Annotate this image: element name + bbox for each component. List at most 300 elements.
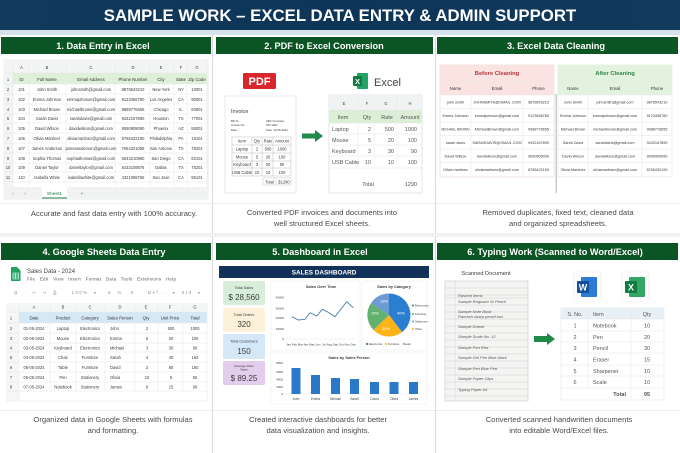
- table: typed items: 95: [644, 392, 650, 398]
- invoice document: Total: [265, 180, 274, 184]
- spreadsheet: customer records: James Anderson: [32, 146, 63, 151]
- spreadsheet: customer records: 109: [18, 165, 26, 170]
- bar chart: sales by sales person: James: [409, 397, 419, 401]
- spreadsheet: sales data: Qty: [143, 316, 150, 320]
- spreadsheet: customer records: F: [180, 65, 183, 70]
- invoice document: Amount: [275, 138, 290, 144]
- table: typed items: 10: [644, 369, 650, 375]
- spreadsheet: customer records: 106: [18, 136, 26, 141]
- invoice document: ABC Company: [266, 119, 285, 123]
- table: after cleaning: Michael Brown: [561, 128, 585, 132]
- Excel result table: 100: [408, 138, 417, 144]
- spreadsheet: customer records: 75201: [191, 165, 203, 170]
- table: typed items: S. No.: [567, 312, 583, 318]
- table: before cleaning: 8765432190: [528, 168, 549, 172]
- spreadsheet: sales data: Laptop: [57, 326, 70, 331]
- pie chart: sales by category: 15%: [371, 310, 379, 316]
- bar chart: sales by sales person: Emma: [311, 397, 320, 401]
- spreadsheet: sales data: Date: [29, 316, 39, 320]
- spreadsheet: customer records: 6: [7, 126, 10, 131]
- spreadsheet: sales data: 3: [146, 346, 149, 350]
- invoice document: USB Cable: [232, 170, 253, 175]
- table: typed items: Eraser: [593, 358, 609, 364]
- Sheets title and menu bar: File Edit View Insert Format Data Tools Extensions Help: [27, 276, 177, 282]
- spreadsheet: sales data: Notebook: [54, 384, 73, 390]
- Excel result table: 20: [388, 138, 394, 144]
- caption: typing work: [486, 415, 632, 435]
- spreadsheet: customer records: 95101: [191, 175, 203, 180]
- invoice document: Rate: [264, 138, 273, 144]
- spreadsheet: customer records: NY: [178, 87, 184, 92]
- spreadsheet: customer records: 6543210980: [122, 156, 145, 161]
- scanned handwritten document: Sample Scale No. 12: [458, 334, 496, 339]
- table: before cleaning: MICHAEL BROWN: [441, 128, 470, 132]
- Excel result table: Rate: [381, 115, 393, 121]
- scanned handwritten document: Sample Pen Blue Pen: [458, 366, 498, 371]
- table: after cleaning: 9123456780: [647, 114, 667, 118]
- caption: data cleaning: [482, 208, 634, 228]
- bar chart: sales by sales person: 8000: [276, 361, 283, 365]
- spreadsheet: sales data: 5: [170, 375, 173, 380]
- spreadsheet: customer records: E: [160, 65, 163, 70]
- spreadsheet: customer records: sophiathomas@gmail.com: [67, 156, 116, 161]
- spreadsheet: sales data: John: [110, 326, 120, 331]
- invoice document: Qty: [254, 138, 261, 144]
- spreadsheet: customer records: 9876543210: [122, 87, 145, 92]
- spreadsheet: customer records: 103: [18, 107, 26, 112]
- table: before cleaning: [440, 65, 554, 177]
- Excel result table: 30: [388, 149, 394, 155]
- spreadsheet: sales data: Emma: [110, 336, 123, 341]
- Excel result table: 100: [408, 160, 417, 166]
- spreadsheet: customer records: C: [90, 65, 93, 70]
- KPI: total sales: $ 28,560: [228, 293, 260, 302]
- table: after cleaning: michaelbrown@gmail.com: [593, 128, 637, 132]
- spreadsheet: customer records: 85001: [191, 126, 203, 131]
- bar chart: sales by sales person: 4000: [276, 378, 283, 382]
- KPI: average order value: [223, 361, 265, 385]
- spreadsheet: customer records: [4, 60, 208, 199]
- caption: PDF conversion: well structured Excel sheets.: [273, 219, 370, 228]
- invoice document: 2: [256, 146, 259, 152]
- spreadsheet: sales data: 03-05-2024: [24, 346, 45, 350]
- table: after cleaning: oliviamartinez@gmail.com: [593, 168, 637, 172]
- scanned handwritten document: Sample Gel Pen Blue black: [458, 355, 508, 360]
- Excel result table: 1290: [405, 182, 417, 188]
- spreadsheet: customer records: isabellawhite@gmail.com: [68, 175, 115, 180]
- scanned handwritten document: Typing Paper A4: [458, 387, 488, 392]
- icon: PDF badge: [243, 73, 276, 89]
- spreadsheet: customer records: 60601: [191, 107, 203, 112]
- heading: Google Sheets: 4. Google Sheets Data Entry: [42, 247, 166, 257]
- table: typed items: 10: [644, 324, 650, 330]
- KPI: total customers: [223, 334, 265, 359]
- bar chart: sales by sales person: [271, 352, 427, 404]
- Excel result table: H: [409, 101, 412, 106]
- table: before cleaning: Name: [450, 86, 462, 91]
- spreadsheet: customer records: 9123456780: [122, 97, 145, 102]
- heading: typing work: 6. Typing Work (Scanned to Word/Excel): [467, 247, 643, 257]
- spreadsheet: sales data: 4: [10, 346, 13, 350]
- caption: PDF conversion: [247, 208, 397, 228]
- line chart: sales over time: [271, 281, 360, 350]
- table: typed items: 2: [573, 335, 577, 341]
- line chart: sales over time: Jan Feb Mar Apr May Jun Jul Aug Sep Oct Nov Dec: [286, 342, 356, 346]
- arrow: PDF to Excel: [302, 130, 323, 142]
- invoice document: Item: [238, 138, 247, 144]
- icon: Excel logo with label: Excel: [374, 77, 401, 89]
- spreadsheet: sales data: 80: [169, 365, 174, 370]
- spreadsheet: customer records: 102: [18, 97, 26, 102]
- table: after cleaning: David Wilson: [562, 154, 584, 158]
- table: typed items: [561, 308, 664, 400]
- spreadsheet: sales data: Chair: [58, 355, 69, 360]
- table: after cleaning: Emma Johnson: [560, 114, 586, 118]
- icon: Excel logo with label: X: [355, 77, 360, 86]
- bar chart: sales by sales person: Sarah: [350, 397, 359, 401]
- spreadsheet: customer records: 4321098765: [122, 175, 145, 180]
- Excel result table: Mouse: [332, 138, 349, 144]
- bar chart: sales by sales person: 6000: [276, 370, 283, 374]
- panel: 3. Excel data cleaning: [436, 37, 680, 228]
- spreadsheet: customer records: San Antonio: [150, 146, 173, 151]
- heading: dashboard: 5. Dashboard in Excel: [272, 247, 368, 257]
- spreadsheet: customer records: A: [20, 65, 23, 70]
- Excel result table: 500: [385, 127, 394, 133]
- spreadsheet: sales data: 20: [169, 336, 174, 341]
- spreadsheet: customer records: johnsmith@gmail.com: [70, 87, 112, 92]
- spreadsheet: sales data: Electronics: [80, 326, 100, 331]
- spreadsheet: sales data: Electronics: [80, 346, 100, 350]
- caption: dashboard: data visualization and insights.: [266, 426, 370, 435]
- spreadsheet: sales data: 500: [168, 326, 175, 331]
- line chart: sales over time: 10000: [276, 327, 284, 331]
- Excel result table: E: [343, 101, 346, 106]
- bar chart: sales by sales person: Sales by Sales Person: [328, 355, 370, 360]
- spreadsheet: customer records: Isabella White: [34, 175, 61, 180]
- spreadsheet: sales data: [6, 303, 207, 401]
- spreadsheet: customer records: B: [46, 65, 49, 70]
- spreadsheet: customer records: 105: [18, 126, 26, 131]
- KPI: average order value: Average Order: [234, 364, 254, 368]
- spreadsheet: customer records: David Wilson: [35, 126, 60, 131]
- caption: data cleaning: Removed duplicates, fixed text, cleaned data: [482, 208, 634, 217]
- table: after cleaning: After Cleaning: [595, 71, 635, 77]
- invoice document: Date: 10-05-2024: [266, 128, 288, 132]
- spreadsheet: sales data: F: [169, 304, 172, 310]
- spreadsheet: sales data: 100: [192, 336, 199, 341]
- caption: data cleaning: and organized spreadsheets.: [509, 219, 607, 228]
- spreadsheet: sales data: 4: [146, 355, 149, 360]
- KPI: total customers: Total Customers: [230, 340, 258, 344]
- heading: data entry: [1, 37, 211, 54]
- KPI: total orders: 320: [237, 320, 251, 329]
- spreadsheet: sales data: 160: [192, 355, 199, 360]
- dashboard title bar: [219, 266, 429, 278]
- spreadsheet: customer records: San Jose: [152, 175, 170, 180]
- spreadsheet: sales data: 5: [10, 355, 13, 360]
- spreadsheet: sales data: 1: [10, 316, 13, 320]
- spreadsheet: sales data: 04-05-2024: [24, 355, 45, 360]
- spreadsheet: customer records: Phone Number: [119, 77, 148, 82]
- spreadsheet: sales data: 1000: [190, 326, 200, 331]
- spreadsheet: customer records: TX: [178, 146, 184, 151]
- invoice document: 100: [279, 170, 286, 175]
- caption: Google Sheets: [33, 415, 193, 435]
- spreadsheet: sales data: Furniture: [82, 365, 99, 370]
- bar chart: sales by sales person: Olivia: [390, 397, 398, 401]
- scanned handwritten document: Scanned Document: [461, 271, 511, 277]
- spreadsheet: customer records: PA: [178, 136, 184, 141]
- spreadsheet: sales data: 6: [10, 365, 13, 370]
- spreadsheet: sales data: Category: [81, 316, 100, 320]
- table: typed items: 5: [573, 369, 577, 375]
- Excel result table: Item: [338, 115, 349, 121]
- spreadsheet: sales data: Mouse: [57, 336, 70, 341]
- panel: 6. typing work: [436, 243, 680, 435]
- spreadsheet: customer records: ›: [24, 191, 26, 196]
- spreadsheet: sales data: Furniture: [82, 355, 99, 360]
- spreadsheet: customer records: Email Address: [77, 77, 105, 82]
- table: before cleaning: JOHNSMITH@GMAIL.COM: [473, 100, 521, 104]
- spreadsheet: customer records: 5: [7, 116, 10, 121]
- Sheets title and menu bar: Sales Data - 2024: [27, 269, 76, 275]
- spreadsheet: customer records: CA: [178, 97, 184, 102]
- heading: typing work: [437, 243, 678, 260]
- spreadsheet: sales data: David: [110, 365, 121, 370]
- table: before cleaning: Email: [492, 86, 502, 91]
- table: after cleaning: 9876543210: [647, 100, 667, 104]
- invoice document: 10: [255, 170, 260, 175]
- spreadsheet: customer records: davidwilson@gmail.com: [69, 126, 114, 131]
- spreadsheet: sales data: 2: [10, 326, 13, 331]
- spreadsheet: sales data: 3: [10, 336, 13, 341]
- spreadsheet: customer records: 9: [7, 156, 10, 161]
- invoice document: 100: [279, 154, 286, 160]
- KPI: total customers: 150: [237, 347, 251, 356]
- table: before cleaning: 9123456780: [528, 114, 549, 118]
- spreadsheet: customer records: 101: [18, 87, 26, 92]
- table: after cleaning: johnsmith@gmail.com: [596, 100, 633, 104]
- spreadsheet: customer records: 90001: [191, 97, 203, 102]
- spreadsheet: sales data: Table: [58, 365, 69, 370]
- table: typed items: Sharpener: [593, 369, 619, 375]
- spreadsheet: sales data: 2: [146, 326, 149, 331]
- spreadsheet: sales data: 15: [169, 384, 174, 390]
- scanned handwritten document: Rashed Items: [458, 293, 483, 298]
- Excel result table: Qty: [363, 115, 372, 121]
- spreadsheet: customer records: 2: [7, 87, 10, 92]
- spreadsheet: sales data: 02-05-2024: [24, 336, 45, 341]
- invoice document: 30: [266, 162, 271, 167]
- table: typed items: Notebook: [593, 324, 617, 330]
- spreadsheet: customer records: IL: [179, 107, 183, 112]
- spreadsheet: customer records: AZ: [178, 126, 184, 131]
- spreadsheet: customer records: Sarah Davis: [36, 116, 58, 121]
- scanned handwritten document: Sample Pen Red: [458, 345, 489, 350]
- icon: Word: [574, 272, 601, 302]
- spreadsheet: customer records: Zip Code: [188, 77, 206, 82]
- spreadsheet: customer records: 8: [7, 146, 10, 151]
- spreadsheet: customer records: G: [195, 65, 199, 70]
- pie chart: sales by category: 40%: [397, 310, 405, 316]
- invoice document: 3: [256, 162, 259, 167]
- caption: typing work: Converted scanned handwritten documents: [486, 415, 632, 424]
- bar chart: sales by sales person: John: [293, 397, 300, 401]
- icon: Excel: [622, 272, 649, 302]
- spreadsheet: sales data: A: [33, 304, 36, 310]
- pie chart: sales by category: 13%: [380, 298, 388, 304]
- spreadsheet: customer records: Houston: [153, 116, 169, 121]
- table: typed items: 3: [573, 346, 577, 352]
- scanned handwritten document: Sample Eraser: [458, 324, 485, 329]
- table: after cleaning: 9432167890: [647, 141, 667, 145]
- spreadsheet: customer records: 8765432190: [122, 136, 145, 141]
- spreadsheet: customer records: 104: [18, 116, 26, 121]
- panel: 5. dashboard in Excel: [213, 243, 435, 435]
- spreadsheet: customer records: 11: [6, 175, 11, 180]
- caption: Google Sheets: and formatting.: [88, 426, 138, 435]
- spreadsheet: sales data: Electronics: [80, 336, 100, 341]
- table: typed items: Total: [613, 392, 626, 398]
- title banner: [0, 0, 680, 30]
- pie chart: sales by category: [362, 281, 429, 350]
- spreadsheet: sales data: 30: [169, 346, 174, 350]
- caption: PDF conversion: Converted PDF invoices and documents into: [247, 208, 397, 217]
- line chart: sales over time: Sales Over Time: [306, 284, 337, 289]
- KPI: total orders: Total Orders: [234, 313, 254, 317]
- spreadsheet: customer records: 3: [7, 97, 10, 102]
- spreadsheet: customer records: ID: [19, 77, 24, 82]
- spreadsheet: sales data: James: [110, 384, 122, 390]
- bar chart: sales by sales person: David: [370, 397, 379, 401]
- table: before cleaning: Before Cleaning: [475, 71, 520, 77]
- table: after cleaning: sarahdavis@gmail.com: [595, 141, 635, 145]
- spreadsheet: customer records: 108: [18, 156, 26, 161]
- line chart: sales over time: 40000: [276, 296, 284, 300]
- spreadsheet: sales data: 07-05-2024: [24, 384, 45, 390]
- invoice document: 5: [256, 154, 259, 160]
- table: before cleaning: 9432167890: [528, 141, 549, 145]
- spreadsheet: sales data: 01-05-2024: [24, 326, 45, 331]
- table: after cleaning: Olivia Martinez: [561, 168, 586, 172]
- spreadsheet: sales data: Total: [190, 316, 200, 320]
- Excel result table: G: [384, 101, 388, 106]
- spreadsheet: customer records: Los Angeles: [150, 97, 172, 102]
- pie chart: sales by category: Electronics: [415, 304, 429, 308]
- spreadsheet: sales data: Sarah: [110, 355, 122, 360]
- scanned handwritten document: Sample Paper Clips: [458, 376, 493, 381]
- spreadsheet: customer records: 10: [6, 165, 11, 170]
- invoice document: 500: [265, 146, 272, 152]
- caption: dashboard: [249, 415, 387, 435]
- title banner: SAMPLE WORK – EXCEL DATA ENTRY & ADMIN SUPPORT: [104, 6, 577, 25]
- table: before cleaning: 9090909090: [528, 154, 549, 158]
- table: typed items: 4: [573, 358, 577, 364]
- pie chart: sales by category: Electronics: [369, 342, 383, 346]
- table: after cleaning: emmajohnson@gmail.com: [593, 114, 637, 118]
- table: after cleaning: Email: [610, 86, 620, 91]
- table: typed items: 6: [573, 380, 577, 386]
- spreadsheet: customer records: CA: [178, 175, 184, 180]
- caption: typing work: into editable Word/Excel files.: [509, 426, 609, 435]
- caption: Google Sheets: Organized data in Google Sheets with formulas: [33, 415, 193, 424]
- table: typed items: Scale: [593, 380, 607, 386]
- spreadsheet: sales data: Olivia: [110, 375, 121, 380]
- spreadsheet: customer records: Dallas: [155, 165, 167, 170]
- icon: Excel logo with label: [353, 73, 401, 89]
- spreadsheet: customer records: 9988776655: [122, 107, 145, 112]
- table: typed items: 10: [644, 380, 650, 386]
- spreadsheet: customer records: Philadelphia: [150, 136, 173, 141]
- table: after cleaning: Sarah Davis: [563, 141, 583, 145]
- spreadsheet: customer records: D: [132, 65, 135, 70]
- table: before cleaning: oliviamartinez@gmail.com: [475, 168, 519, 172]
- table: typed items: 30: [644, 346, 650, 352]
- spreadsheet: sales data: 40: [169, 355, 174, 360]
- table: before cleaning: john smith: [446, 100, 464, 104]
- spreadsheet: customer records: Daniel Taylor: [35, 165, 59, 170]
- spreadsheet: sales data: B: [62, 304, 65, 310]
- invoice document: [225, 96, 296, 193]
- spreadsheet: customer records: Michael Brown: [34, 107, 61, 112]
- table: before cleaning: SARAHDAVIS@GMAIL.COM: [472, 141, 522, 145]
- heading: PDF conversion: 2. PDF to Excel Conversion: [264, 41, 384, 51]
- spreadsheet: customer records: City: [157, 77, 166, 82]
- spreadsheet: customer records: 107: [18, 146, 26, 151]
- table: after cleaning: John Smith: [564, 100, 582, 104]
- spreadsheet: customer records: 10001: [191, 87, 203, 92]
- heading: data cleaning: [437, 37, 678, 54]
- invoice document: Date:: [231, 128, 238, 132]
- spreadsheet: customer records: 92101: [191, 156, 203, 161]
- panel: 1. data entry in Excel: [0, 37, 211, 218]
- scanned handwritten document: [445, 271, 528, 401]
- pie chart: sales by category: Furniture: [415, 312, 427, 316]
- heading: PDF conversion: [216, 37, 433, 54]
- scanned handwritten document: Sample Reguster Sr Pencil: [458, 299, 506, 304]
- caption: data entry: Accurate and fast data entry with 100% accuracy.: [31, 209, 197, 218]
- spreadsheet: customer records: Sophia Thomas: [33, 156, 61, 161]
- invoice document: Mouse: [236, 154, 249, 160]
- spreadsheet: sales data: G: [193, 304, 197, 310]
- heading: dashboard: [216, 243, 433, 260]
- pie chart: sales by category: Stationery: [415, 320, 428, 324]
- spreadsheet: sales data: Unit Price: [161, 316, 180, 320]
- Excel result table: F: [366, 101, 369, 106]
- spreadsheet: sales data: C: [89, 304, 92, 310]
- pie chart: sales by category: Books: [403, 342, 411, 346]
- spreadsheet: sales data: 6: [146, 384, 149, 390]
- invoice document: Laptop: [236, 146, 249, 152]
- invoice document: 20: [266, 154, 271, 160]
- spreadsheet: customer records: 19101: [191, 136, 203, 141]
- invoice document: Keyboard: [233, 162, 251, 167]
- spreadsheet: customer records: ‹: [12, 191, 14, 196]
- table: before cleaning: emmajohnson@gmail.com: [475, 114, 519, 118]
- spreadsheet: sales data: 2: [146, 365, 149, 370]
- spreadsheet: customer records: emmajohnson@gmail.com: [67, 97, 116, 102]
- table: before cleaning: Emma Johnson: [442, 114, 469, 118]
- table: typed items: Pen: [593, 335, 603, 341]
- spreadsheet: customer records: jamesanderson@gmail.com: [65, 146, 117, 151]
- Excel result table: Total: [362, 182, 374, 188]
- spreadsheet: sales data: 05-05-2024: [24, 365, 45, 370]
- invoice document: Invoice No:: [231, 123, 245, 127]
- table: typed items: 15: [644, 358, 650, 364]
- table: after cleaning: [558, 65, 672, 177]
- table: before cleaning: MichaelBrown@gmail.com: [475, 128, 519, 132]
